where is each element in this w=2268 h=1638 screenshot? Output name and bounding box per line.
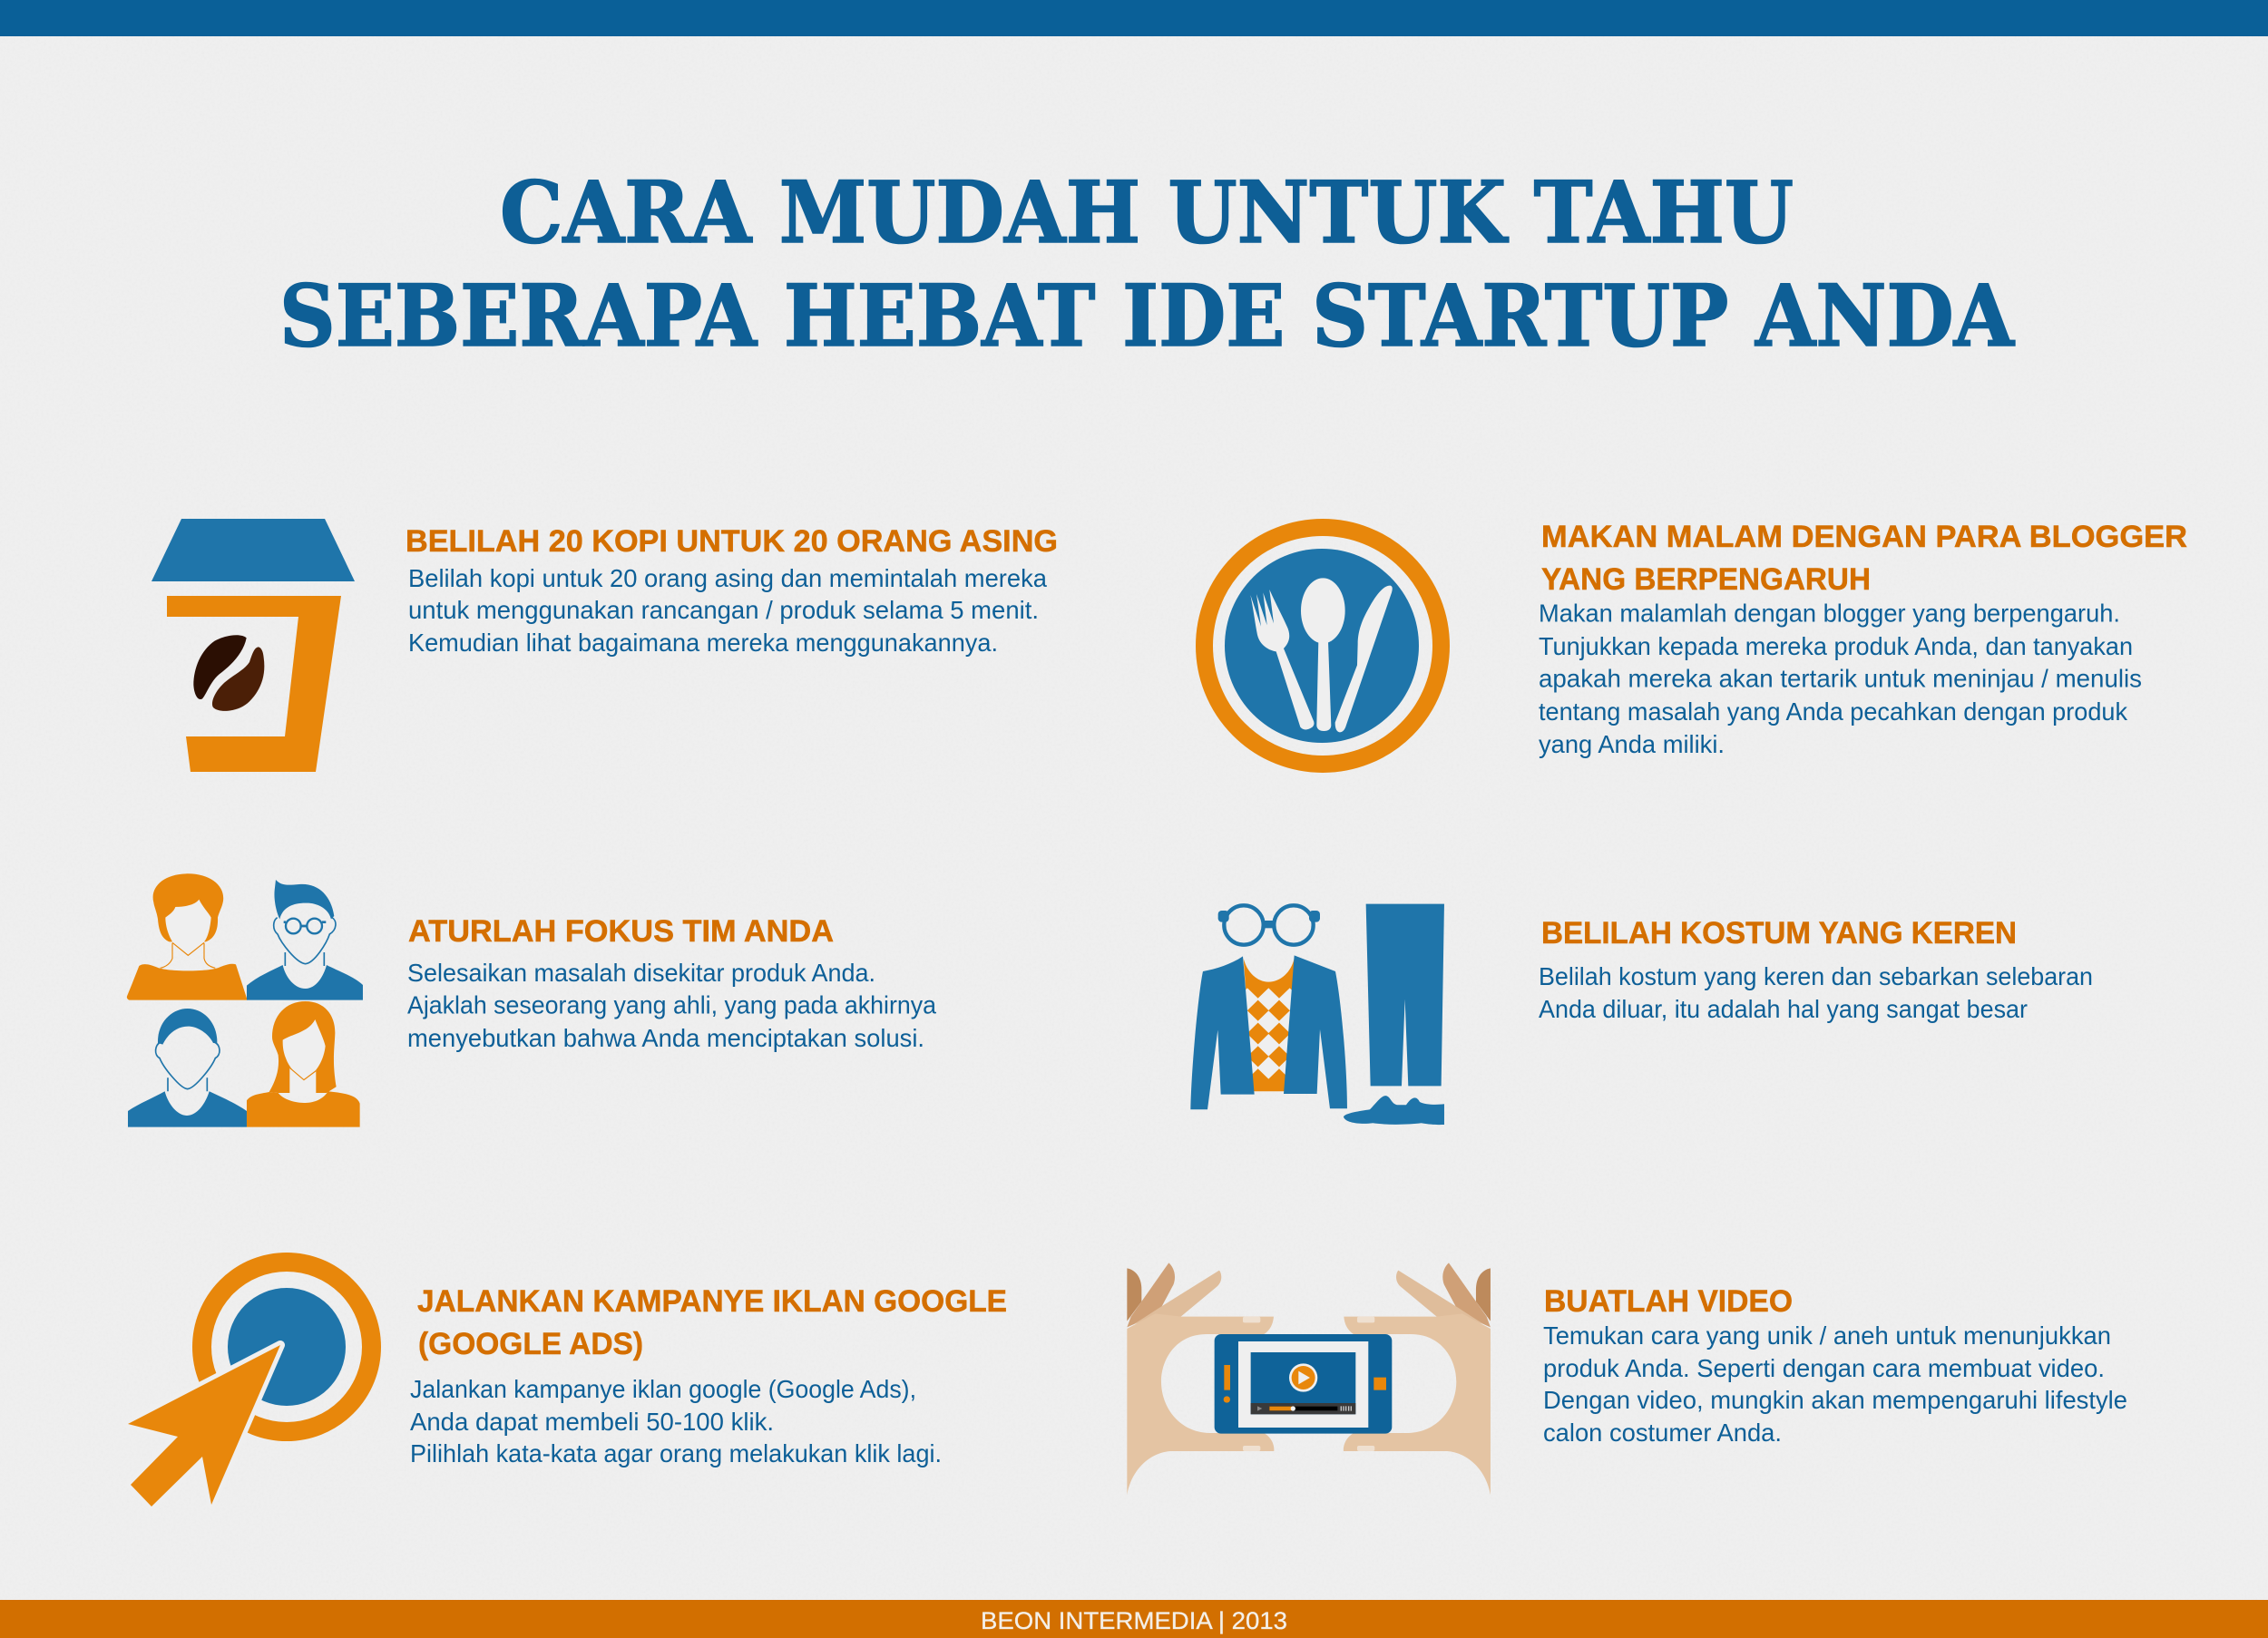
icon: target and cursor: [128, 1263, 372, 1506]
icon: plate and cutlery: [1205, 528, 1441, 764]
body text: yang Anda miliki.: [1539, 730, 1725, 758]
shoes: [1344, 1096, 1444, 1125]
body text: [407, 959, 936, 1052]
body text: apakah mereka akan tertarik untuk meninjau / menulis: [1539, 664, 2142, 693]
heading: BELILAH 20 KOPI UNTUK 20 ORANG ASING: [406, 524, 1058, 559]
body text: Belilah kostum yang keren dan sebarkan selebaran: [1539, 962, 2093, 990]
footer bar: [0, 1600, 2268, 1638]
body text: Temukan cara yang unik / aneh untuk menunjukkan: [1543, 1321, 2111, 1350]
panel: buy coffee: [152, 519, 1058, 772]
person: blue-haired man with glasses top right: [247, 880, 363, 1000]
body text: [1539, 962, 2093, 1023]
vest: [1236, 959, 1301, 1091]
body text: Ajaklah seseorang yang ahli, yang pada akhirnya: [407, 990, 936, 1019]
heading: (GOOGLE ADS): [418, 1327, 643, 1361]
body text: [410, 1375, 942, 1467]
left hand: [1127, 1263, 1274, 1495]
body text: Pilihlah kata-kata agar orang melakukan klik lagi.: [410, 1439, 942, 1467]
top bar: [0, 0, 2268, 36]
heading: [417, 1284, 1007, 1361]
body text: produk Anda. Seperti dengan cara membuat video.: [1543, 1354, 2105, 1382]
body text: Makan malamlah dengan blogger yang berpengaruh.: [1539, 599, 2120, 628]
icon: four team members: [127, 873, 363, 1127]
heading: [1541, 520, 2187, 597]
panel: google ads: [128, 1263, 1007, 1506]
panel: dinner with bloggers: [1205, 520, 2187, 764]
person: blue-haired man bottom left: [128, 1009, 247, 1127]
panel: make video: [1127, 1263, 2127, 1495]
person: orange-haired woman top left: [127, 873, 248, 1000]
icon: hands holding phone: [1127, 1263, 1491, 1495]
body text: Kemudian lihat bagaimana mereka menggunakannya.: [408, 629, 998, 657]
body text: [1539, 599, 2142, 758]
footer bar: BEON INTERMEDIA | 2013: [981, 1607, 1287, 1634]
panel: cool costume: [1190, 904, 2093, 1125]
body text: Dengan video, mungkin akan mempengaruhi lifestyle: [1543, 1386, 2127, 1414]
body text: menyebutkan bahwa Anda menciptakan solusi.: [407, 1024, 924, 1052]
title: CARA MUDAH UNTUK TAHU: [500, 163, 1794, 263]
trousers: [1366, 904, 1444, 1086]
body text: Tunjukkan kepada mereka produk Anda, dan tanyakan: [1539, 632, 2133, 660]
body text: [408, 564, 1047, 657]
body text: calon costumer Anda.: [1543, 1419, 1782, 1447]
body text: Belilah kopi untuk 20 orang asing dan memintalah mereka: [408, 564, 1047, 592]
body text: tentang masalah yang Anda pecahkan dengan produk: [1539, 697, 2128, 726]
title: SEBERAPA HEBAT IDE STARTUP ANDA: [279, 267, 2015, 366]
body text: Anda dapat membeli 50-100 klik.: [410, 1408, 774, 1436]
panel: team focus: [127, 873, 936, 1127]
heading: YANG BERPENGARUH: [1541, 562, 1871, 597]
heading: BELILAH KOSTUM YANG KEREN: [1541, 916, 2017, 951]
body text: Selesaikan masalah disekitar produk Anda.: [407, 959, 875, 987]
phone: [1215, 1334, 1392, 1434]
right hand: [1344, 1263, 1491, 1495]
person: long orange-haired woman bottom right: [247, 1001, 360, 1127]
body text: Jalankan kampanye iklan google (Google Ads),: [410, 1375, 916, 1403]
body text: Anda diluar, itu adalah hal yang sangat besar: [1539, 995, 2028, 1023]
jacket: [1190, 955, 1347, 1109]
heading: BUATLAH VIDEO: [1544, 1284, 1793, 1319]
heading: JALANKAN KAMPANYE IKLAN GOOGLE: [417, 1284, 1007, 1319]
heading: MAKAN MALAM DENGAN PARA BLOGGER: [1541, 520, 2187, 554]
heading: ATURLAH FOKUS TIM ANDA: [408, 914, 834, 949]
title: [279, 163, 2015, 366]
body text: [1543, 1321, 2127, 1447]
glasses: [1218, 905, 1320, 945]
body text: untuk menggunakan rancangan / produk selama 5 menit.: [408, 596, 1039, 624]
icon: costume with glasses, jacket, trousers, shoes: [1190, 904, 1444, 1125]
icon: coffee cup: [152, 519, 355, 772]
